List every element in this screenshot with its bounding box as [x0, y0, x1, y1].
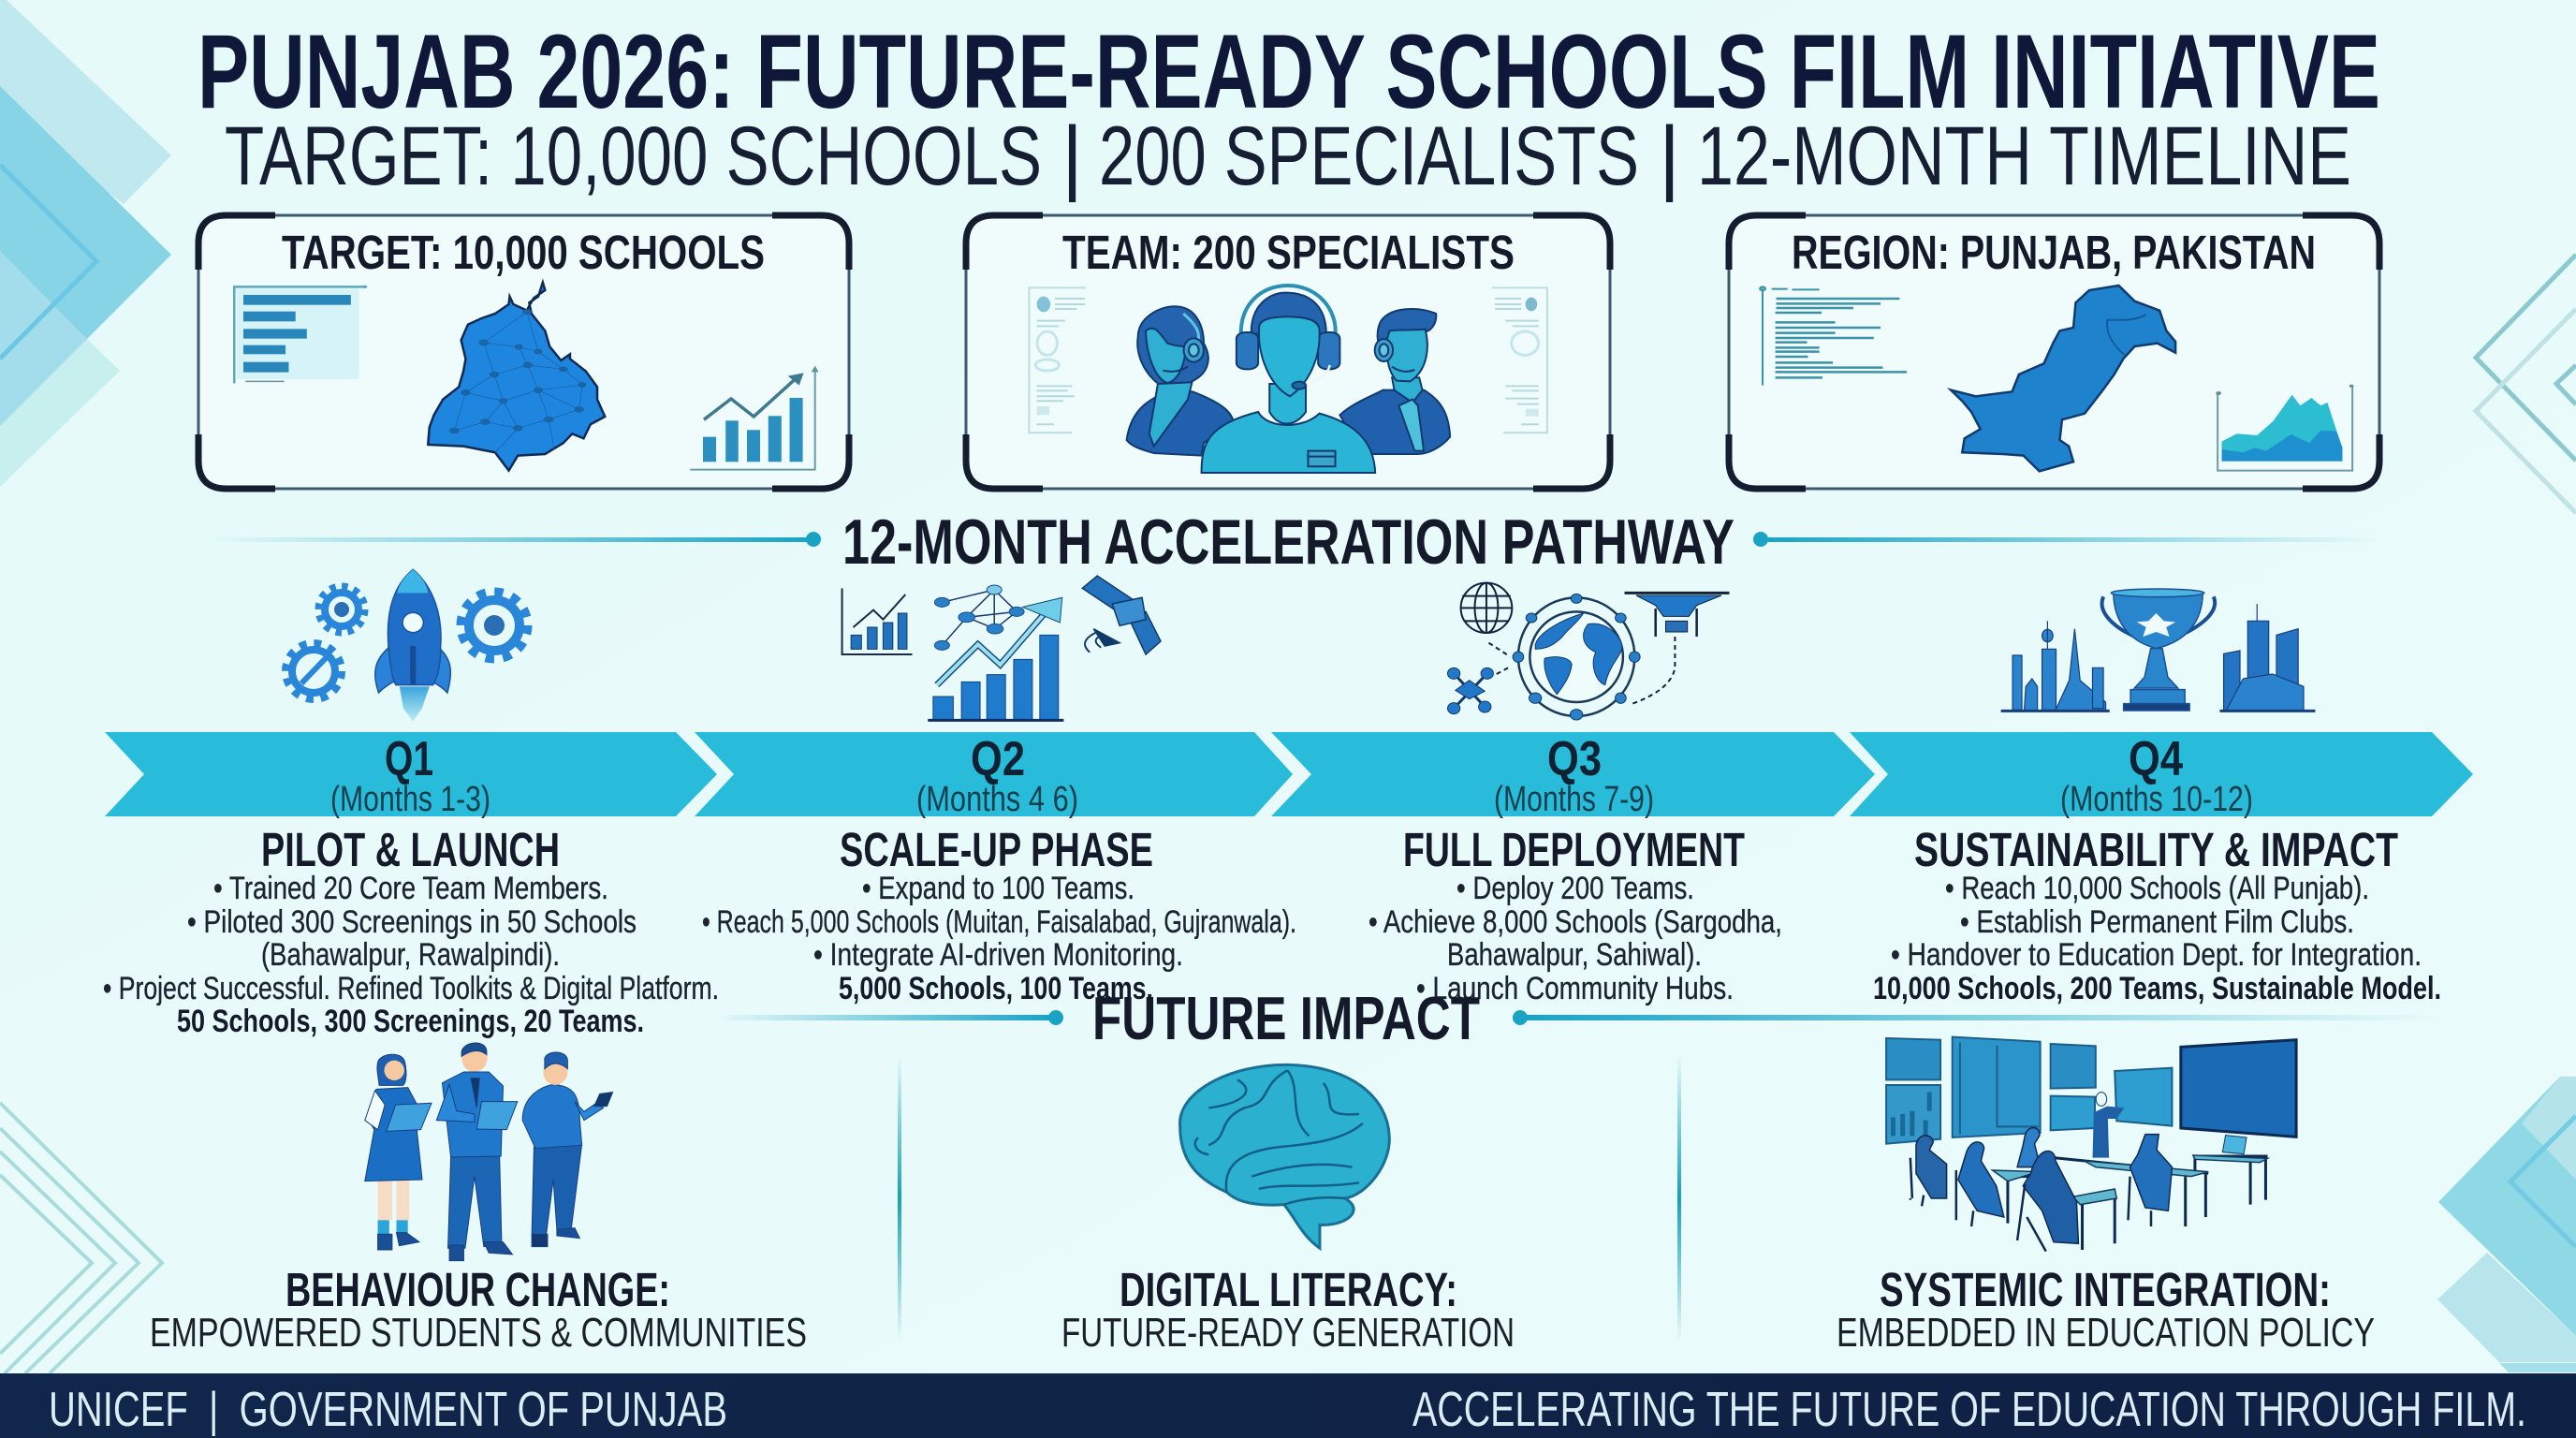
- icon: students: [365, 1043, 613, 1261]
- small bar chart: [842, 588, 913, 654]
- section heading: future impact: FUTURE IMPACT: [1092, 984, 1480, 1052]
- text list chart: [1760, 286, 1907, 386]
- impact label: systemic integration: SYSTEMIC INTEGRATION:: [1880, 1263, 2331, 1316]
- impact label: digital literacy: FUTURE-READY GENERATION: [1061, 1310, 1515, 1356]
- column: Q4: 10,000 Schools, 200 Teams, Sustainable Model.: [1873, 971, 2441, 1006]
- icon: brain: [1180, 1064, 1389, 1248]
- left skyline: [2001, 621, 2110, 711]
- subtitle: 200 SPECIALISTS: [1099, 109, 1639, 202]
- impact label: behaviour change: [150, 1263, 807, 1356]
- column: Q1: • Project Successful. Refined Toolkits & Digital Platform.: [103, 971, 719, 1006]
- subtitle: |: [1061, 109, 1083, 202]
- column: Q3: [1368, 732, 1782, 1006]
- subtitle: 12-MONTH TIMELINE: [1697, 109, 2351, 202]
- chairs: [1910, 1158, 2151, 1252]
- tables: [2006, 1156, 2267, 1250]
- column: Q1: 50 Schools, 300 Screenings, 20 Teams.: [177, 1004, 644, 1039]
- footer bar: [0, 1373, 2576, 1438]
- icon: classroom with screens: [1886, 1037, 2296, 1252]
- panel: target: [198, 215, 849, 489]
- dashed links: [1488, 637, 1675, 704]
- big bars and arrow: [928, 597, 1063, 720]
- impact label: digital literacy: DIGITAL LITERACY:: [1120, 1263, 1457, 1316]
- timeline arrows: [105, 732, 2473, 816]
- column: Q2: Q2: [971, 732, 1025, 786]
- gears: [286, 587, 527, 698]
- footer: partners: UNICEF | GOVERNMENT OF PUNJAB: [49, 1383, 727, 1437]
- panel: region: [1729, 215, 2379, 489]
- column: Q1: Q1: [385, 732, 433, 786]
- presenter: [2093, 1093, 2124, 1158]
- column: Q1: • Trained 20 Core Team Members.: [213, 871, 608, 906]
- column: Q1: (Months 1-3): [330, 780, 490, 819]
- section heading: future impact: [713, 984, 2436, 1052]
- subtitle: [225, 109, 2351, 202]
- icon: globe, drones: [1447, 583, 1729, 720]
- decoration: bottom-left outlines: [0, 1103, 162, 1373]
- laptop: [2222, 1136, 2247, 1154]
- network: [934, 585, 1024, 650]
- subtitle: |: [1659, 109, 1680, 202]
- icon: growth chart, network, satellite: [842, 576, 1161, 720]
- girl: [365, 1054, 432, 1250]
- column: Q4: Q4: [2129, 732, 2183, 786]
- document: left faded: [1029, 287, 1086, 433]
- decoration: top-left diamonds: [0, 0, 171, 487]
- dividers: [898, 1055, 1681, 1341]
- chart: rising bars with arrow: [690, 366, 819, 470]
- column: Q2: [702, 732, 1296, 1006]
- horizontal bar chart: [234, 286, 367, 383]
- impact label: behaviour change: EMPOWERED STUDENTS & COMMUNITIES: [150, 1310, 807, 1356]
- right specialist: [1339, 309, 1450, 454]
- right skyline: [2219, 604, 2315, 711]
- impact label: systemic integration: EMBEDDED IN EDUCATION POLICY: [1837, 1310, 2375, 1356]
- heading: team: TEAM: 200 SPECIALISTS: [1062, 226, 1515, 279]
- column: Q4: [1873, 732, 2441, 1006]
- column: Q3: Bahawalpur, Sahiwal).: [1447, 937, 1702, 973]
- column: Q3: • Achieve 8,000 Schools (Sargodha,: [1368, 904, 1782, 940]
- section heading: pathway: [201, 506, 2378, 578]
- decoration: bottom-right diamonds: [2437, 1077, 2576, 1372]
- column: Q4: • Handover to Education Dept. for Integration.: [1891, 937, 2422, 973]
- satellite: [1082, 576, 1161, 654]
- column: Q1: [103, 732, 719, 1039]
- column: Q2: • Reach 5,000 Schools (Muitan, Faisalabad, Gujranwala).: [702, 904, 1296, 940]
- impact label: behaviour change: BEHAVIOUR CHANGE:: [285, 1263, 670, 1316]
- icon: three specialists with headsets: [1127, 286, 1450, 473]
- column: Q2: (Months 4 6): [916, 780, 1078, 819]
- map: Punjab network: [428, 283, 605, 471]
- chart: area: [2216, 385, 2354, 471]
- man: [436, 1043, 518, 1261]
- impact label: digital literacy: [1061, 1263, 1515, 1356]
- section heading: pathway: 12-MONTH ACCELERATION PATHWAY: [842, 506, 1734, 578]
- small drone: [1447, 668, 1493, 714]
- column: Q4: SUSTAINABILITY & IMPACT: [1914, 823, 2398, 876]
- wall screens: [1886, 1037, 2296, 1144]
- impact label: systemic integration: [1837, 1263, 2375, 1356]
- map: Pakistan: [1951, 286, 2175, 471]
- earth with ring: [1513, 594, 1640, 720]
- column: Q1: (Bahawalpur, Rawalpindi).: [261, 937, 560, 973]
- column: Q3: Q3: [1547, 732, 1602, 786]
- drone: [1625, 593, 1729, 637]
- trophy: [2102, 589, 2215, 711]
- column: Q3: • Launch Community Hubs.: [1416, 971, 1734, 1006]
- rocket: [375, 569, 450, 722]
- subtitle: TARGET: 10,000 SCHOOLS: [225, 109, 1042, 202]
- heading: region: REGION: PUNJAB, PAKISTAN: [1792, 226, 2316, 279]
- column: Q4: • Establish Permanent Film Clubs.: [1960, 904, 2354, 940]
- centre specialist: [1202, 286, 1375, 473]
- icon: trophy and skyline: [2001, 589, 2315, 711]
- boy: [522, 1052, 613, 1247]
- decoration: top-right outlines: [2476, 255, 2576, 513]
- column: Q3: (Months 7-9): [1494, 780, 1654, 819]
- column: Q3: • Deploy 200 Teams.: [1456, 871, 1694, 906]
- left specialist: [1127, 306, 1233, 456]
- column: Q2: • Expand to 100 Teams.: [862, 871, 1134, 906]
- column: Q1: PILOT & LAUNCH: [261, 823, 560, 876]
- column: Q2: • Integrate AI-driven Monitoring.: [813, 937, 1183, 973]
- column: Q2: SCALE-UP PHASE: [840, 823, 1153, 876]
- heading: target: TARGET: 10,000 SCHOOLS: [282, 226, 765, 279]
- document: right faded: [1492, 287, 1547, 433]
- table tops: [1993, 1155, 2267, 1205]
- column: Q3: FULL DEPLOYMENT: [1403, 823, 1745, 876]
- icon: rocket and gears: [286, 569, 527, 722]
- seated people: [1916, 1128, 2172, 1243]
- panel: team: [966, 215, 1610, 489]
- column: Q4: (Months 10-12): [2060, 780, 2253, 819]
- wire globe: [1461, 583, 1512, 633]
- column: Q2: 5,000 Schools, 100 Teams.: [839, 971, 1153, 1006]
- column: Q1: • Piloted 300 Screenings in 50 Schools: [187, 904, 637, 940]
- column: Q4: • Reach 10,000 Schools (All Punjab).: [1945, 871, 2369, 906]
